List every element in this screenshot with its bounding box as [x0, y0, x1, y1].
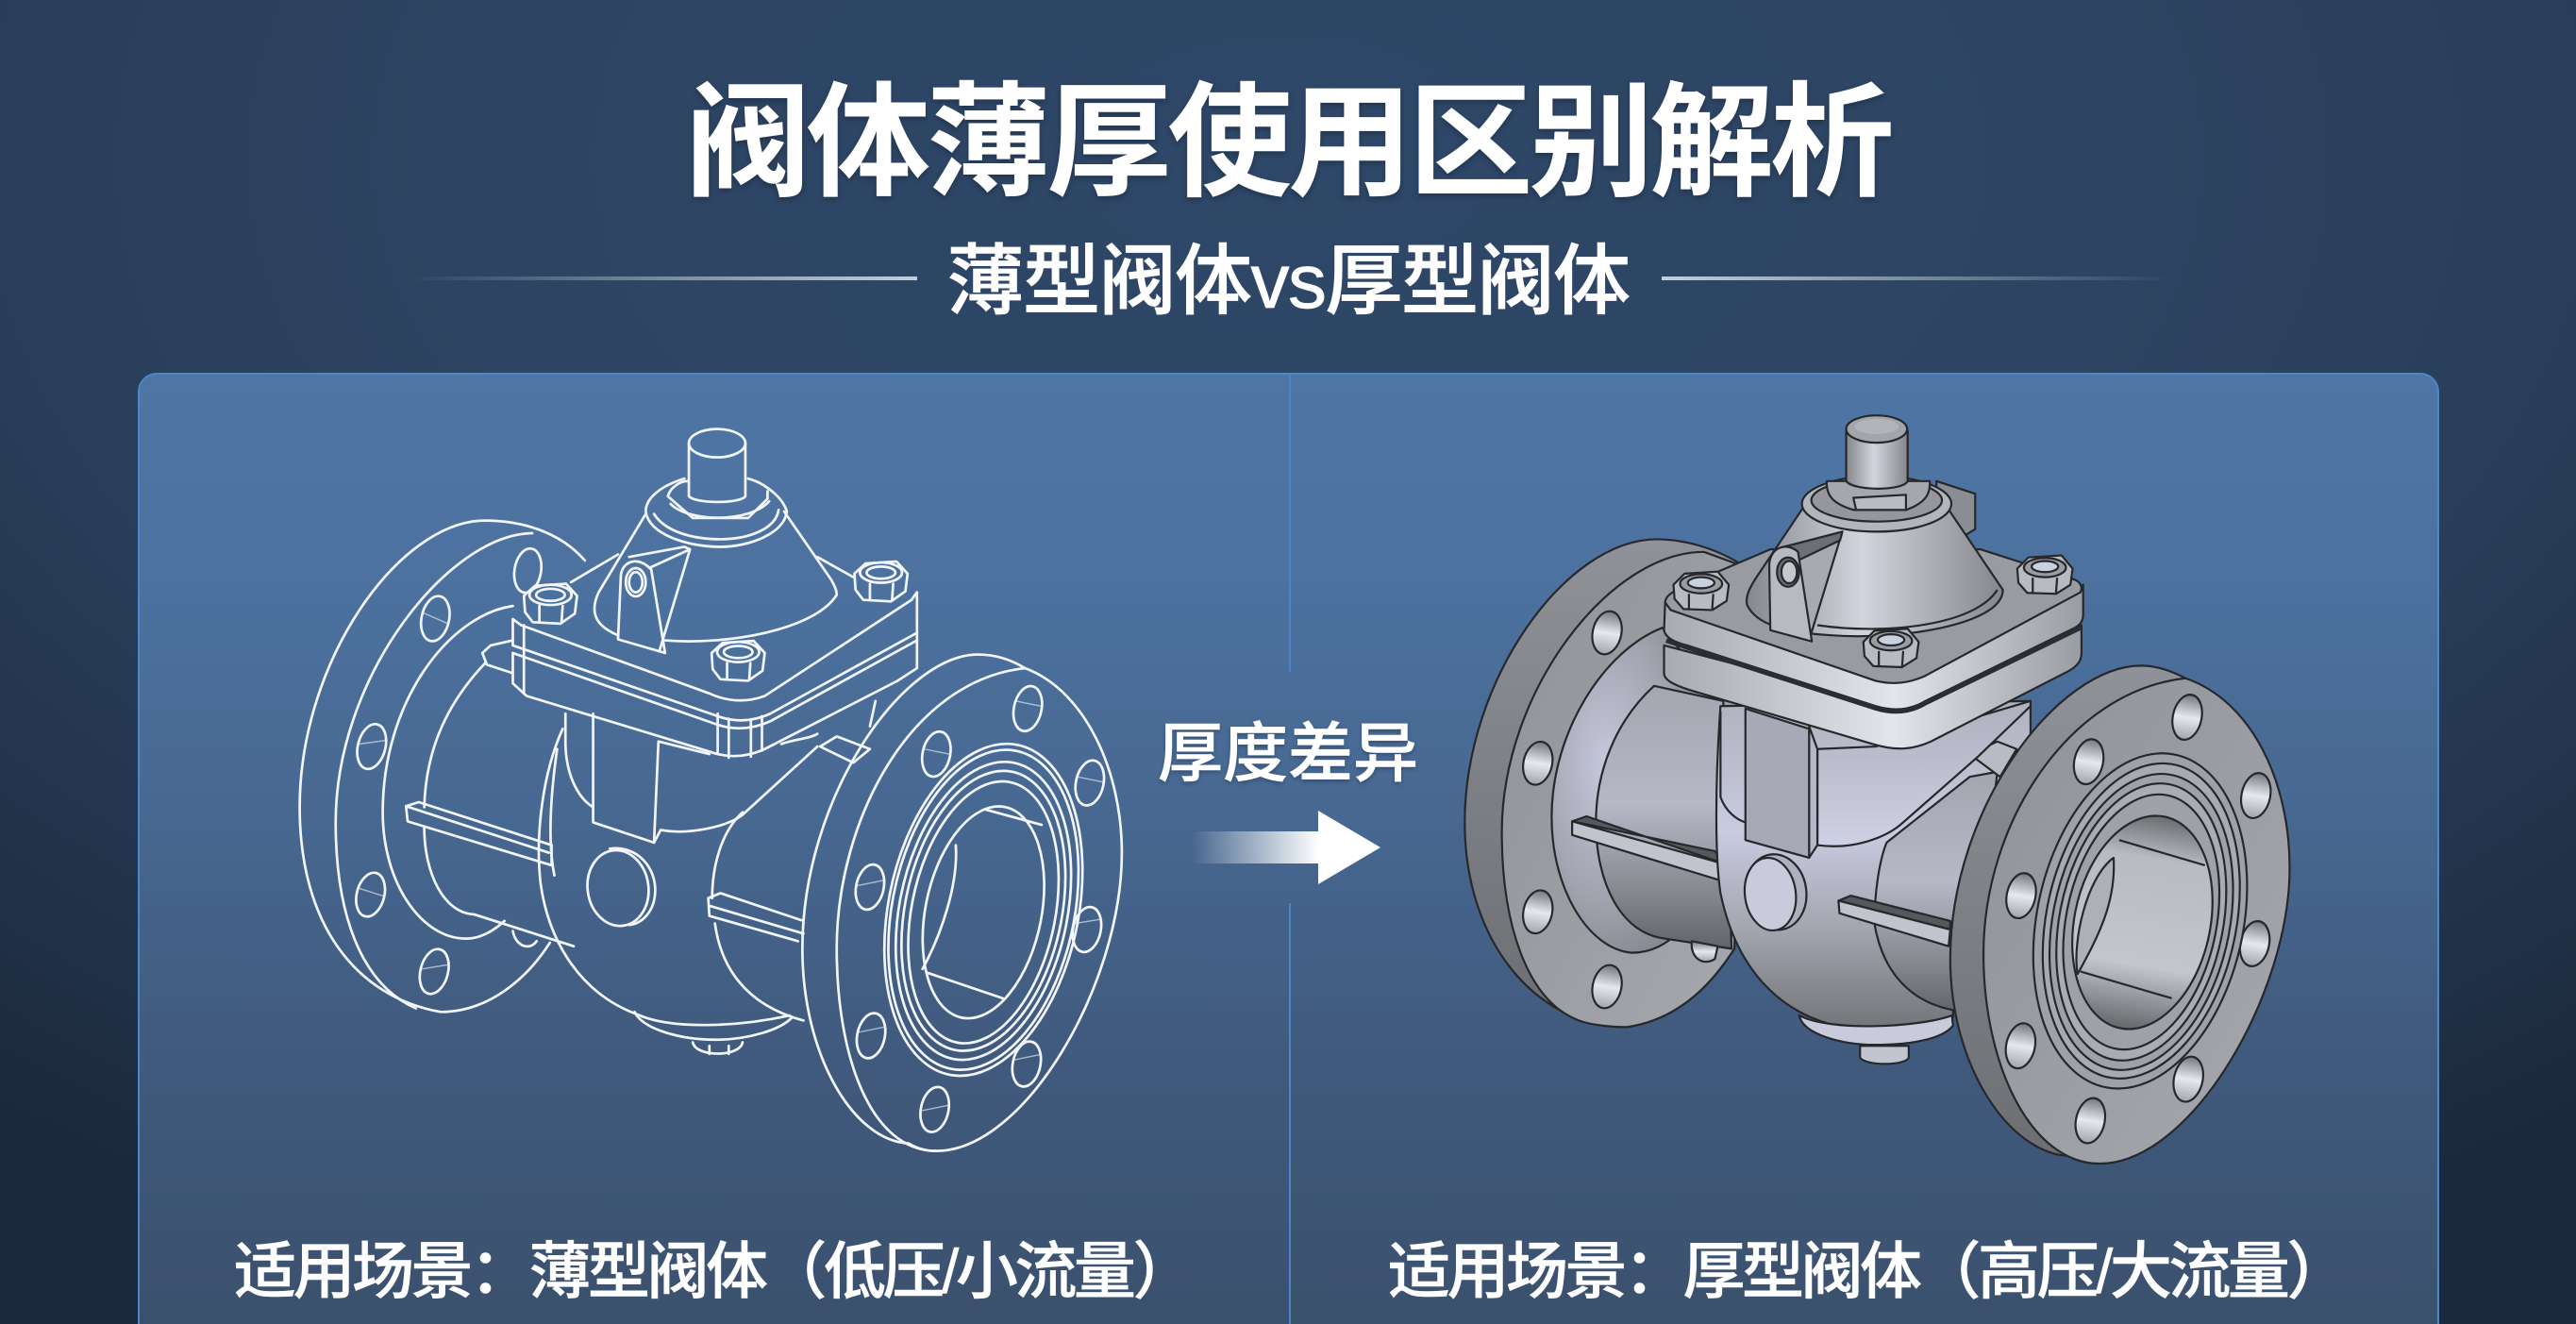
bolt	[711, 641, 764, 680]
bonnet plates	[512, 555, 917, 758]
title: 阀体薄厚使用区别解析	[685, 74, 1891, 212]
left subtitle rule	[406, 277, 917, 280]
bonnet plates	[1664, 549, 2083, 748]
bolt	[524, 584, 577, 624]
comparison panel background	[138, 373, 2439, 1324]
right subtitle rule	[1662, 277, 2173, 280]
bolt	[855, 561, 908, 601]
right flange	[802, 655, 1122, 1151]
bonnet cone and lug	[594, 478, 837, 653]
center divider lower	[1289, 903, 1291, 1324]
stem	[668, 429, 769, 518]
illustration: thick valve body shaded	[1464, 414, 2291, 1165]
valve body	[1716, 701, 2031, 1064]
left flange	[300, 521, 585, 1012]
bolt	[1864, 628, 1918, 667]
right flange	[1950, 665, 2290, 1164]
valve body	[539, 701, 876, 1054]
bolt	[1673, 572, 1729, 610]
left flange	[1464, 539, 1746, 1027]
left caption: thin valve: 适用场景：薄型阀体（低压/小流量）	[234, 1236, 1192, 1306]
arrow: thin to thick	[1197, 811, 1380, 884]
center divider upper	[1289, 375, 1291, 672]
bolt	[2017, 556, 2073, 594]
bonnet cone, lugs and stem	[1747, 415, 2003, 642]
right caption: thick valve: 适用场景：厚型阀体（高压/大流量）	[1388, 1236, 2346, 1306]
subtitle: 薄型阀体vs厚型阀体	[946, 239, 1629, 325]
illustration: thin valve body wireframe	[298, 427, 1123, 1152]
thickness difference label: 厚度差异	[1158, 717, 1418, 790]
